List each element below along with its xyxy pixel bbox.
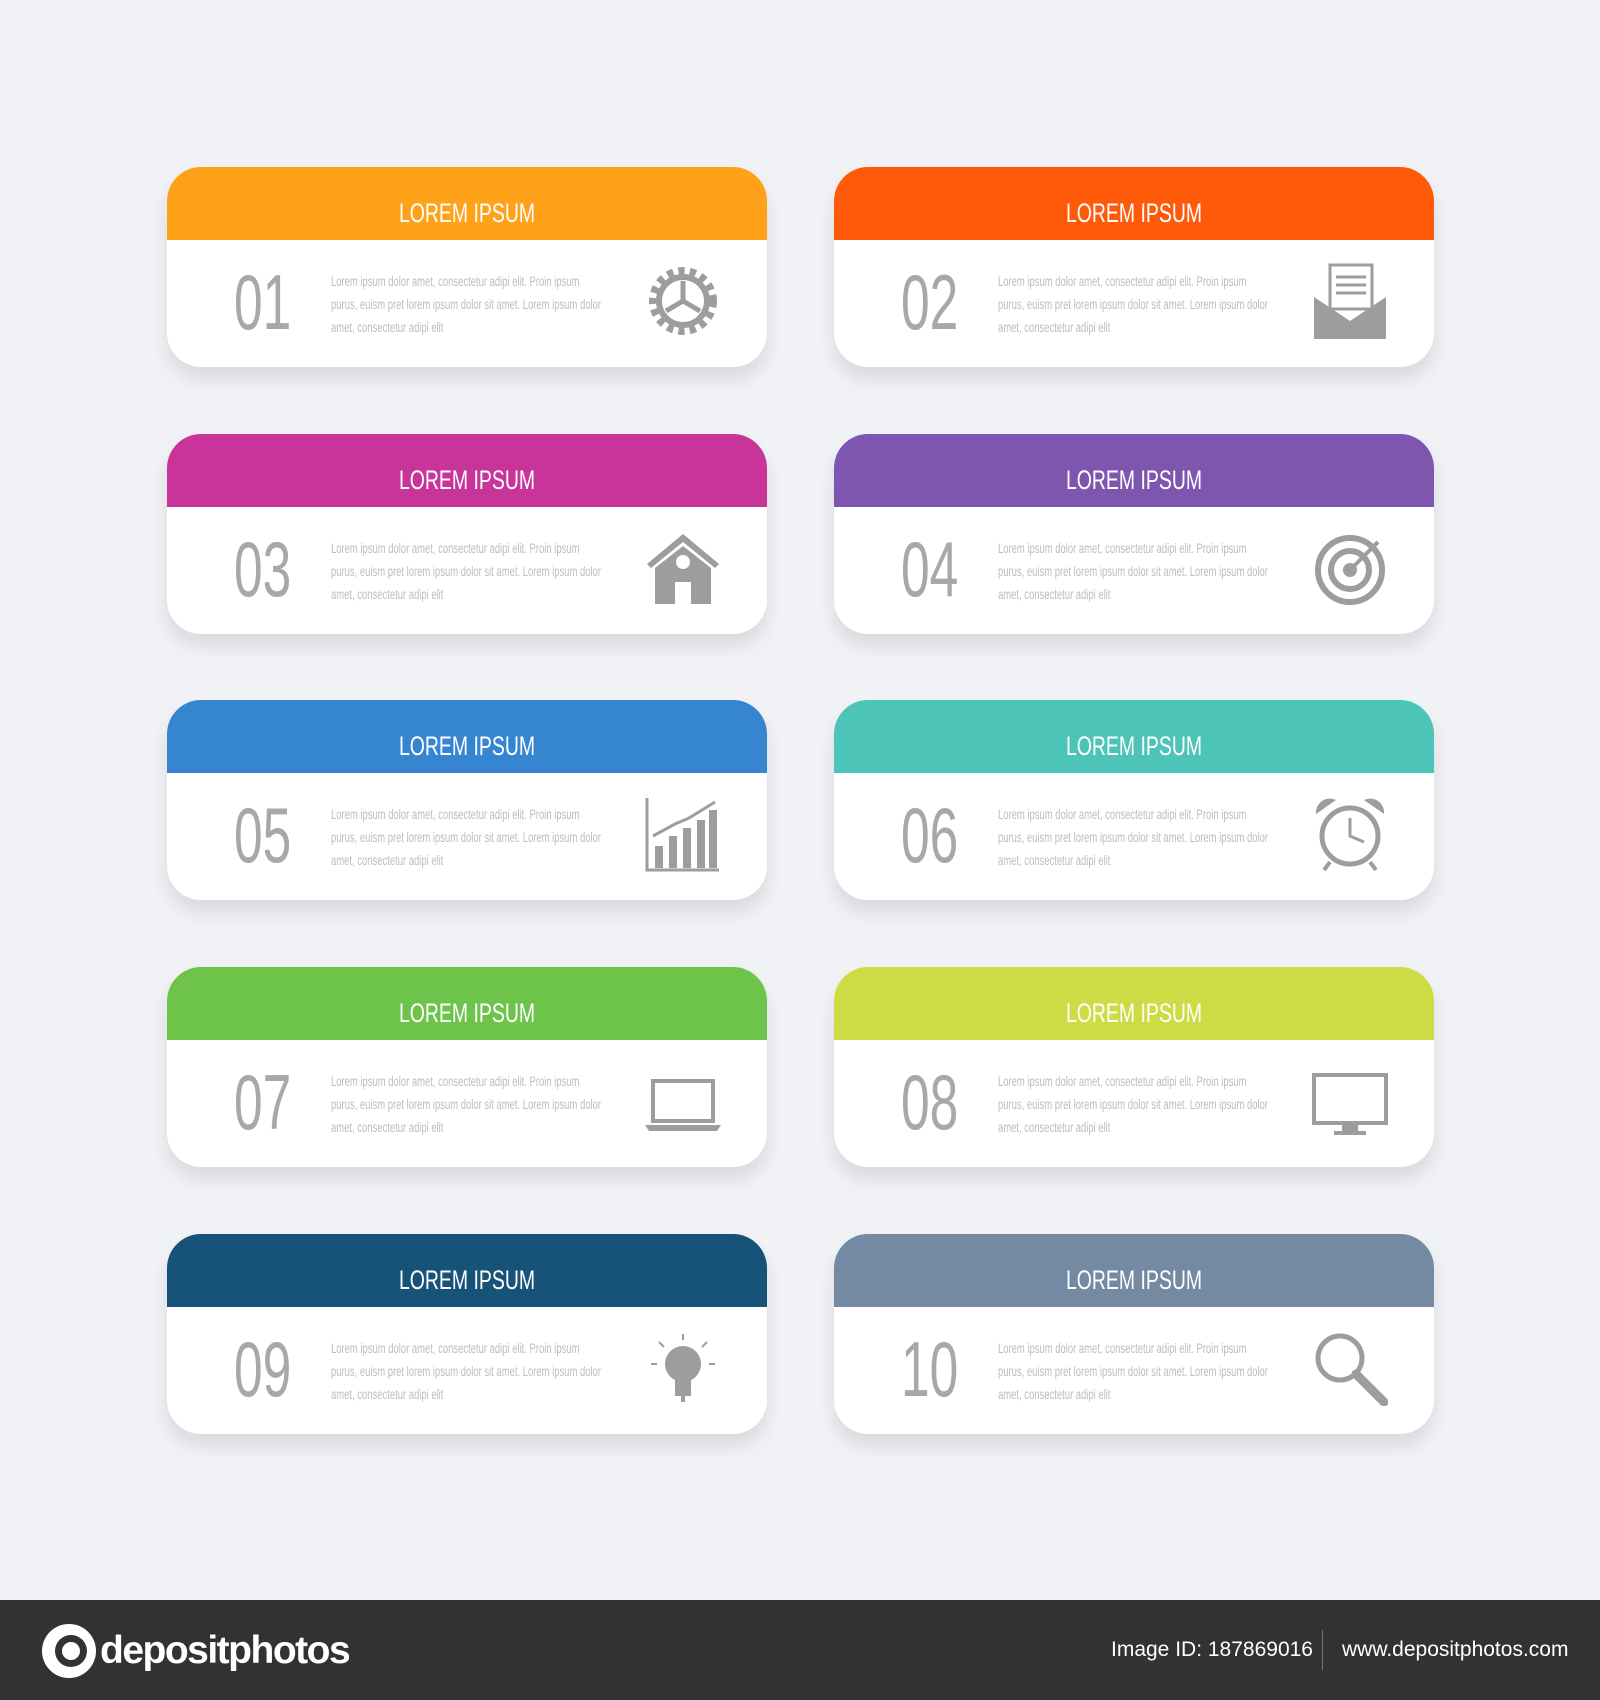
number 05: 05 — [234, 791, 291, 879]
header 01: LOREM IPSUM — [399, 198, 535, 228]
header 10 — [834, 1234, 1434, 1307]
icon: monitor — [1312, 1073, 1388, 1135]
icon: magnifier — [1316, 1334, 1388, 1406]
header 08 — [834, 967, 1434, 1040]
card 08 — [834, 967, 1434, 1167]
card 02 — [834, 167, 1434, 367]
number 09: 09 — [234, 1325, 291, 1413]
text 07: Lorem ipsum dolor amet, consectetur adipi elit. Proin ipsum purus, euism pret lorem ipsum dolor sit amet. Lorem ipsum dolor amet, consectetur adipi elit — [331, 1074, 601, 1135]
image id: Image ID: 187869016 — [1111, 1638, 1313, 1661]
text 10: Lorem ipsum dolor amet, consectetur adipi elit. Proin ipsum purus, euism pret lorem ipsum dolor sit amet. Lorem ipsum dolor amet, consectetur adipi elit — [998, 1341, 1268, 1402]
number 02: 02 — [901, 258, 958, 346]
text 03: Lorem ipsum dolor amet, consectetur adipi elit. Proin ipsum purus, euism pret lorem ipsum dolor sit amet. Lorem ipsum dolor amet, consectetur adipi elit — [331, 541, 601, 602]
text 06: Lorem ipsum dolor amet, consectetur adipi elit. Proin ipsum purus, euism pret lorem ipsum dolor sit amet. Lorem ipsum dolor amet, consectetur adipi elit — [998, 807, 1268, 868]
header 03: LOREM IPSUM — [399, 465, 535, 495]
number 06: 06 — [901, 791, 958, 879]
header 09: LOREM IPSUM — [399, 1265, 535, 1295]
card 09 — [167, 1234, 767, 1434]
card 04 — [834, 434, 1434, 634]
card 05 — [167, 700, 767, 900]
footer bar — [0, 1600, 1600, 1700]
text 01: Lorem ipsum dolor amet, consectetur adipi elit. Proin ipsum purus, euism pret lorem ipsum dolor sit amet. Lorem ipsum dolor amet, consectetur adipi elit — [331, 274, 601, 335]
card 07 — [167, 967, 767, 1167]
number 10: 10 — [901, 1325, 958, 1413]
website: www.depositphotos.com — [1342, 1638, 1568, 1661]
icon: laptop — [645, 1079, 721, 1131]
icon: light bulb — [651, 1334, 715, 1402]
logo: depositphotos — [100, 1629, 349, 1672]
icon: alarm clock — [1316, 798, 1384, 872]
header 06: LOREM IPSUM — [1066, 731, 1202, 761]
card 01 — [167, 167, 767, 367]
icon: house — [647, 534, 719, 604]
number 04: 04 — [901, 525, 958, 613]
header 05: LOREM IPSUM — [399, 731, 535, 761]
logo — [42, 1624, 350, 1678]
header 01 — [167, 167, 767, 240]
text 09: Lorem ipsum dolor amet, consectetur adipi elit. Proin ipsum purus, euism pret lorem ipsum dolor sit amet. Lorem ipsum dolor amet, consectetur adipi elit — [331, 1341, 601, 1402]
card 10 — [834, 1234, 1434, 1434]
header 04 — [834, 434, 1434, 507]
text 02: Lorem ipsum dolor amet, consectetur adipi elit. Proin ipsum purus, euism pret lorem ipsum dolor sit amet. Lorem ipsum dolor amet, consectetur adipi elit — [998, 274, 1268, 335]
number 03: 03 — [234, 525, 291, 613]
number 07: 07 — [234, 1058, 291, 1146]
text 04: Lorem ipsum dolor amet, consectetur adipi elit. Proin ipsum purus, euism pret lorem ipsum dolor sit amet. Lorem ipsum dolor amet, consectetur adipi elit — [998, 541, 1268, 602]
header 02 — [834, 167, 1434, 240]
header 02: LOREM IPSUM — [1066, 198, 1202, 228]
header 03 — [167, 434, 767, 507]
icon: target — [1315, 535, 1385, 605]
card 06 — [834, 700, 1434, 900]
header 07: LOREM IPSUM — [399, 998, 535, 1028]
text 05: Lorem ipsum dolor amet, consectetur adipi elit. Proin ipsum purus, euism pret lorem ipsum dolor sit amet. Lorem ipsum dolor amet, consectetur adipi elit — [331, 807, 601, 868]
header 09 — [167, 1234, 767, 1307]
text 08: Lorem ipsum dolor amet, consectetur adipi elit. Proin ipsum purus, euism pret lorem ipsum dolor sit amet. Lorem ipsum dolor amet, consectetur adipi elit — [998, 1074, 1268, 1135]
card 03 — [167, 434, 767, 634]
number 01: 01 — [234, 258, 291, 346]
number 08: 08 — [901, 1058, 958, 1146]
icon: envelope — [1314, 264, 1386, 339]
header 04: LOREM IPSUM — [1066, 465, 1202, 495]
icon: bar chart — [646, 798, 719, 872]
header 08: LOREM IPSUM — [1066, 998, 1202, 1028]
header 10: LOREM IPSUM — [1066, 1265, 1202, 1295]
icon: gear — [649, 267, 717, 335]
header 06 — [834, 700, 1434, 773]
header 05 — [167, 700, 767, 773]
header 07 — [167, 967, 767, 1040]
